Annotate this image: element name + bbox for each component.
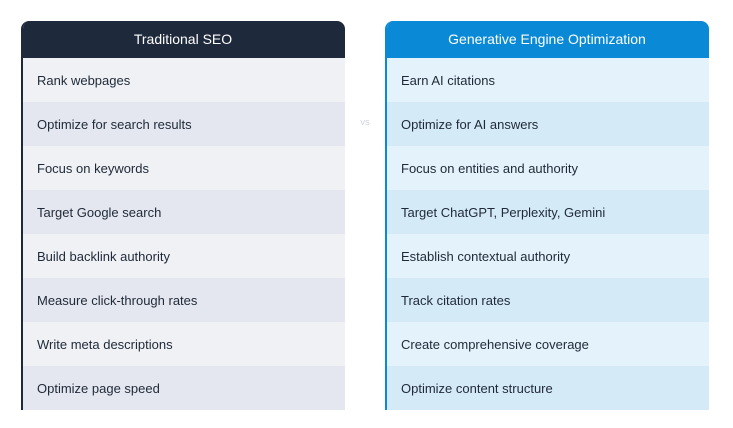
panel: generative engine optimization: Target ChatGPT, Perplexity, Gemini bbox=[401, 205, 605, 220]
panel: generative engine optimization: Create comprehensive coverage bbox=[401, 337, 589, 352]
panel: generative engine optimization: Establish contextual authority bbox=[401, 249, 570, 264]
vs badge: VS bbox=[360, 120, 370, 127]
panel: traditional SEO bbox=[21, 21, 345, 410]
panel: traditional SEO: Measure click-through rates bbox=[37, 293, 197, 308]
heading: Traditional SEO: Traditional SEO bbox=[134, 31, 232, 47]
panel: traditional SEO: Focus on keywords bbox=[37, 161, 149, 176]
panel: traditional SEO: Optimize page speed bbox=[37, 381, 160, 396]
vs badge bbox=[353, 112, 377, 136]
panel: generative engine optimization: Optimize content structure bbox=[401, 381, 553, 396]
panel: generative engine optimization: Optimize for AI answers bbox=[401, 117, 538, 132]
panel: generative engine optimization: Earn AI citations bbox=[401, 73, 495, 88]
panel: generative engine optimization: Track citation rates bbox=[401, 293, 510, 308]
panel: traditional SEO: Target Google search bbox=[37, 205, 161, 220]
heading: Generative Engine Optimization: Generative Engine Optimization bbox=[448, 31, 646, 47]
panel: generative engine optimization: Focus on entities and authority bbox=[401, 161, 578, 176]
panel: traditional SEO: Build backlink authority bbox=[37, 249, 170, 264]
panel: traditional SEO: Rank webpages bbox=[37, 73, 130, 88]
panel: generative engine optimization bbox=[385, 21, 709, 410]
panel: traditional SEO: Write meta descriptions bbox=[37, 337, 173, 352]
heading: Traditional SEO bbox=[21, 21, 345, 58]
heading: Generative Engine Optimization bbox=[385, 21, 709, 58]
panel: traditional SEO: Optimize for search results bbox=[37, 117, 192, 132]
